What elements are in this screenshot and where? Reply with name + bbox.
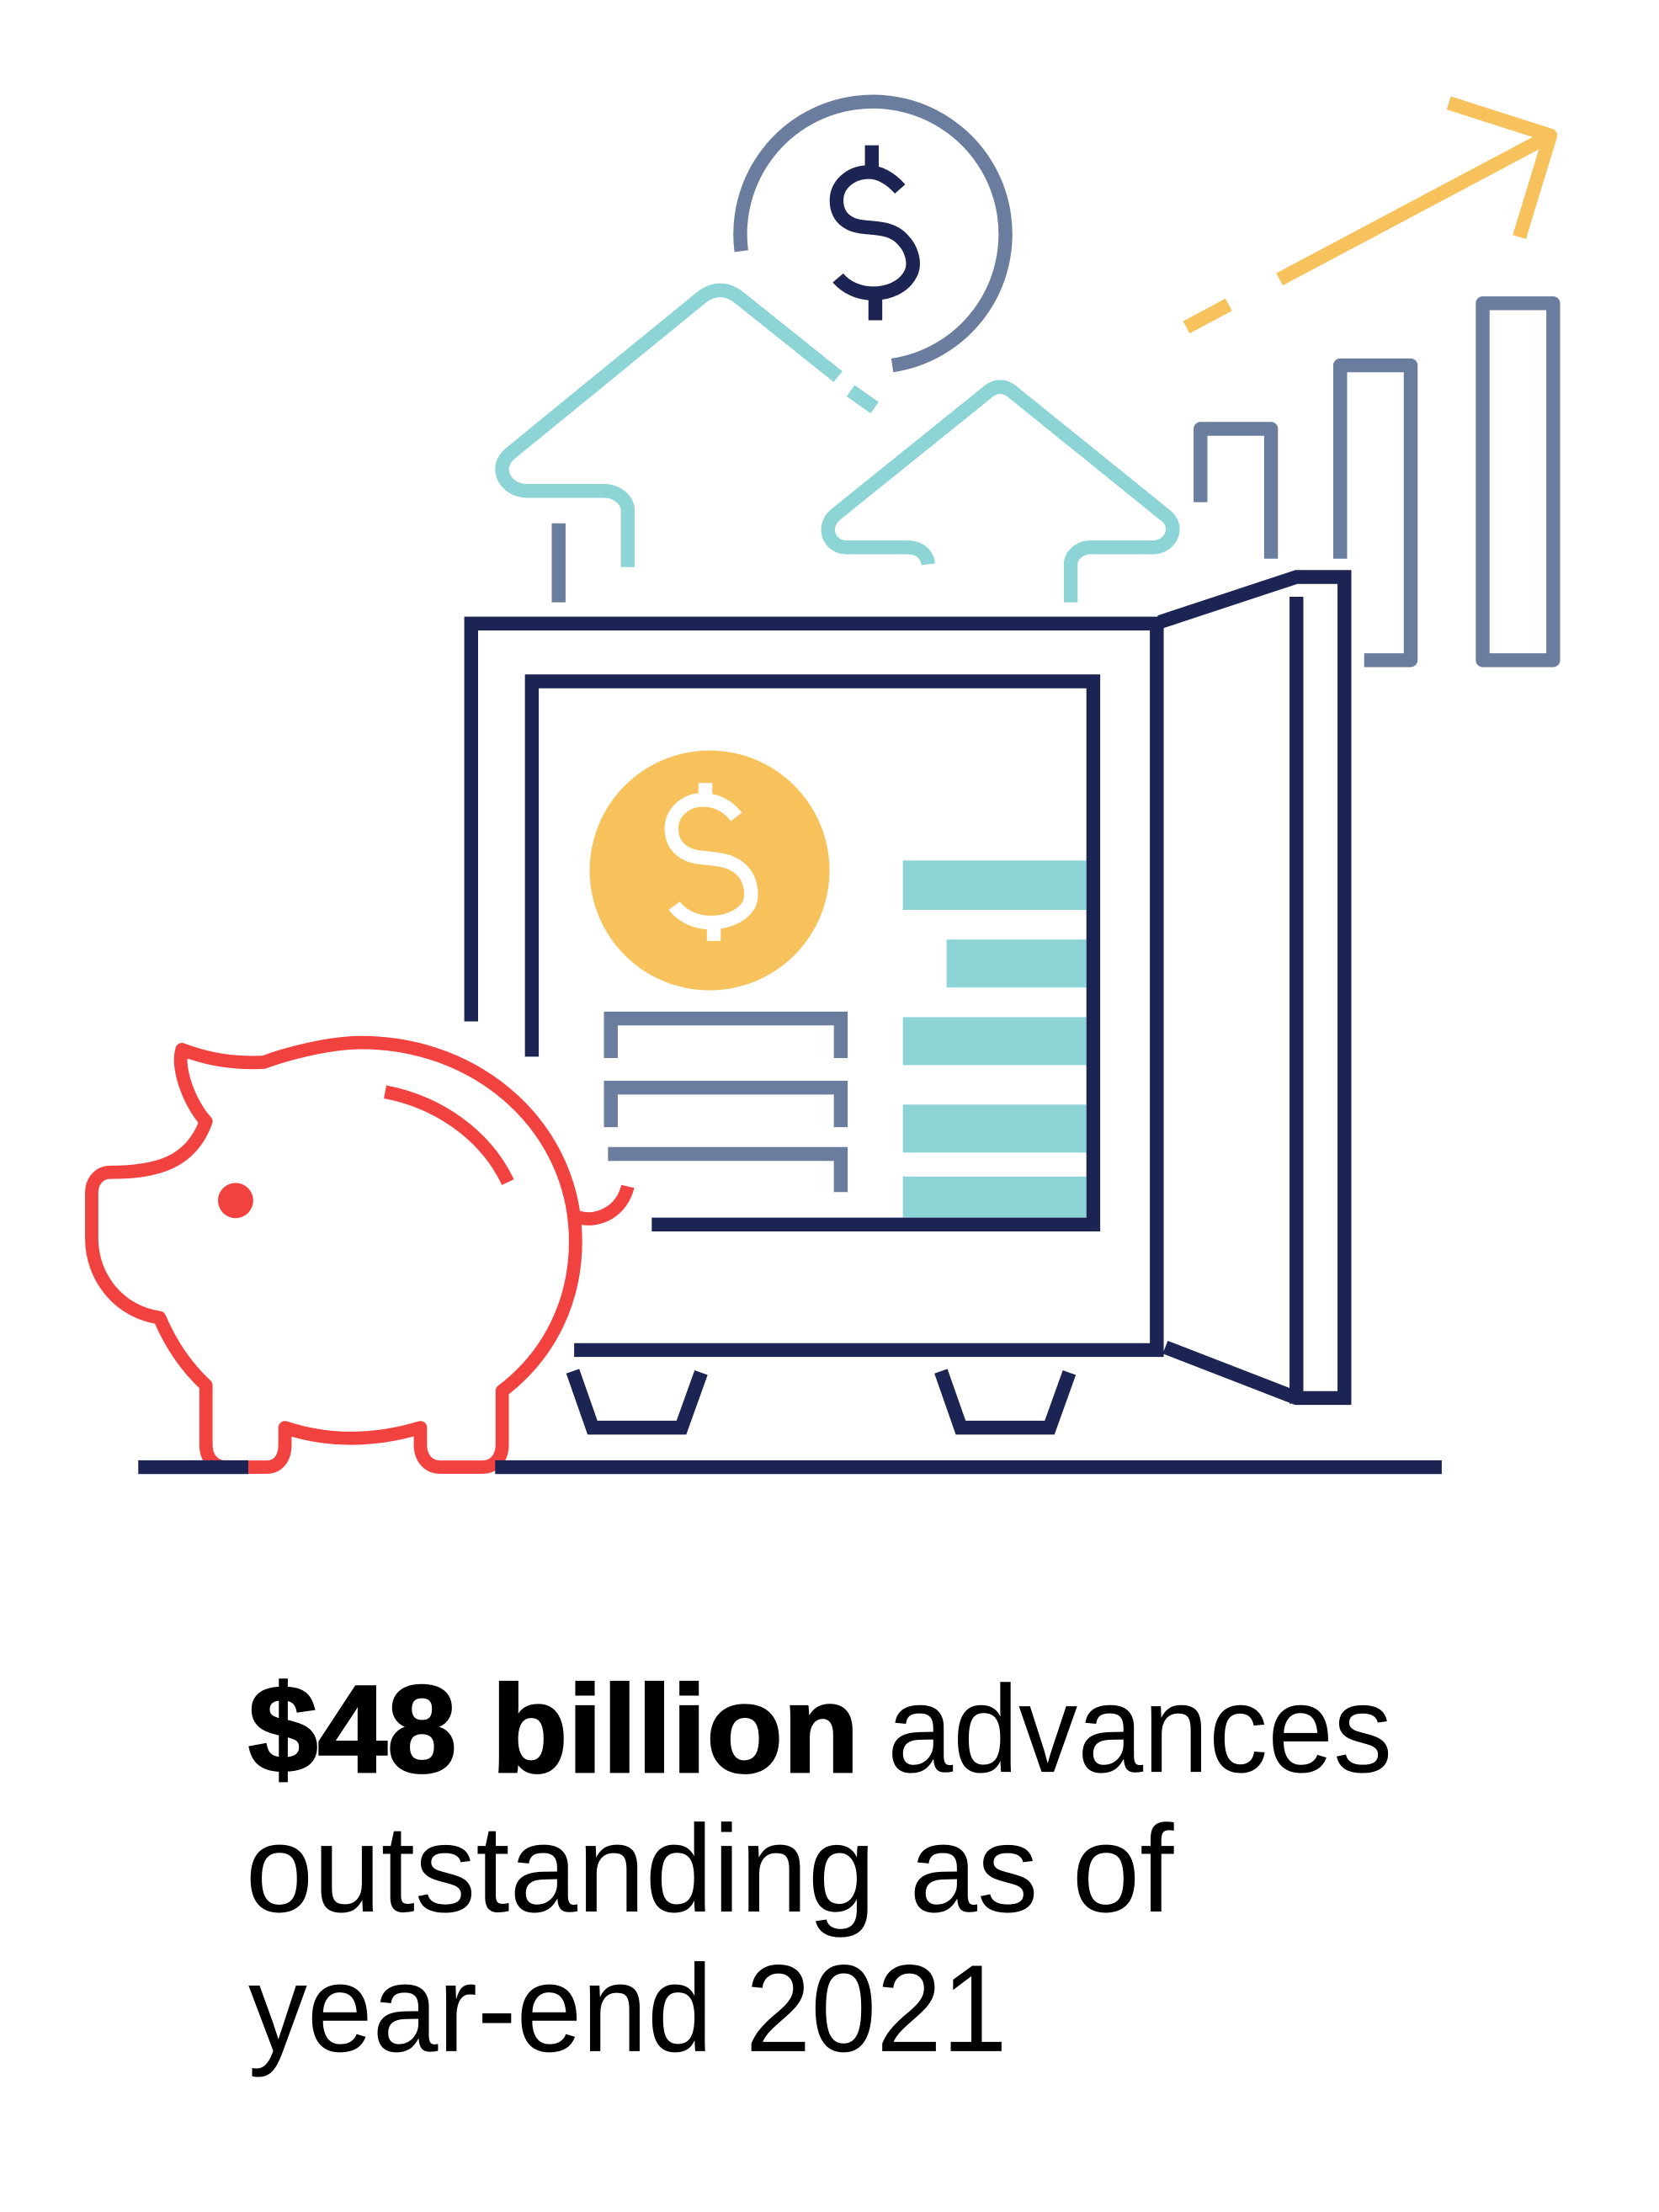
pig back highlight: [386, 1092, 508, 1183]
icon: gold coin: [590, 751, 830, 991]
stacked teal bars: [903, 860, 1087, 1217]
pig tail: [578, 1187, 628, 1219]
caption text: outstanding as of: [246, 1800, 1174, 1938]
bar chart: rising outlined bars: [559, 303, 1553, 660]
caption text: $48 billion: [248, 1660, 859, 1799]
pig body: [92, 1043, 576, 1467]
floor line: [138, 1463, 1442, 1471]
caption text: advances: [887, 1660, 1392, 1799]
safe interior frame: [532, 682, 1093, 1225]
stacked slate bill outlines: [608, 1018, 841, 1192]
icon: open safe: [471, 577, 1344, 1428]
caption text: [246, 1660, 1392, 2078]
pig eye: [218, 1183, 253, 1218]
icon: dollar coin outline: [740, 102, 1006, 365]
icon: piggy bank: [92, 1043, 628, 1467]
icon: right house outline: [828, 387, 1172, 603]
safe body: [471, 624, 1157, 1350]
arrow: rising yellow trend arrow: [1187, 103, 1550, 327]
icon: left house outline: [502, 290, 875, 567]
caption text: year-end 2021: [248, 1939, 1008, 2078]
safe door: [1160, 577, 1344, 1404]
safe feet: [572, 1371, 1069, 1428]
